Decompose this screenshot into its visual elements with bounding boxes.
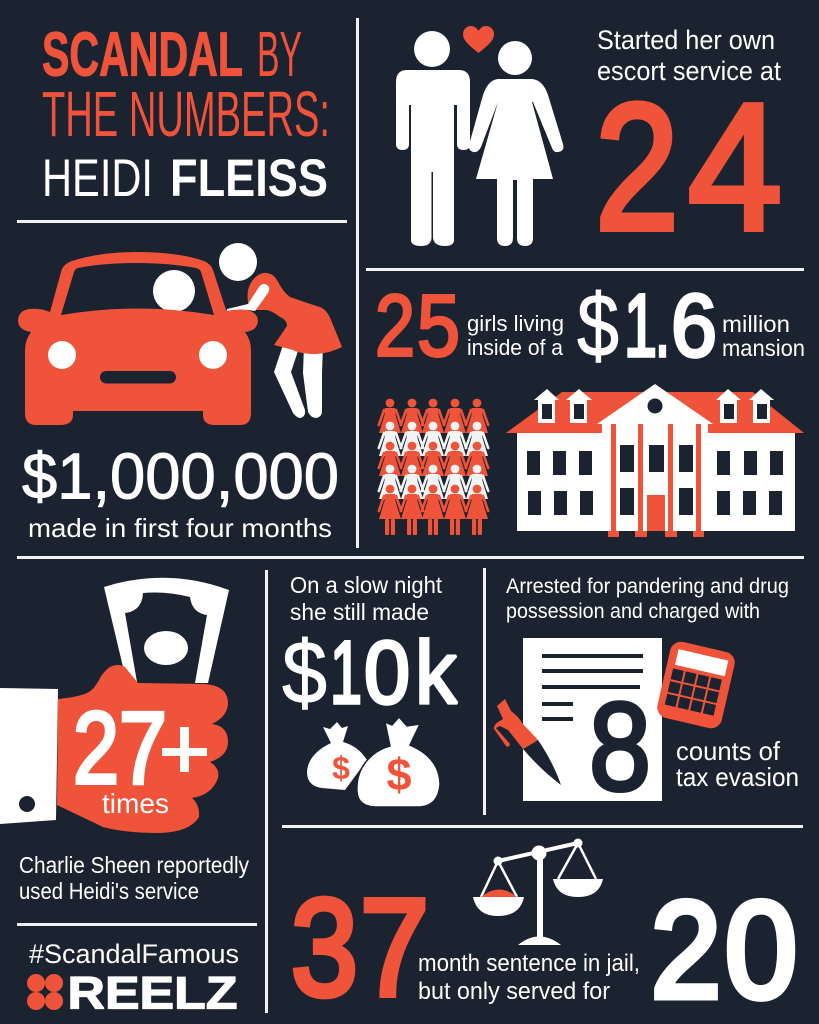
text: Charlie Sheen reportedly used Heidi's service: Charlie Sheen reportedly	[19, 852, 249, 878]
text: counts of tax evasion	[676, 736, 799, 792]
number: $10k: k	[415, 622, 457, 722]
title: HEIDI	[42, 149, 153, 208]
figure: $1,000,000 made in first four months: $1,000,000	[22, 440, 339, 512]
figure: 25 girls living inside of a: girls living	[467, 311, 564, 336]
icon: money bags: $	[332, 750, 350, 786]
icon: document with 8	[523, 638, 662, 817]
number: 37: 3	[291, 871, 358, 1024]
text: month sentence in jail: month sentence in jail,	[418, 950, 640, 977]
icon: mansion	[506, 384, 804, 537]
icon: hand in shirt cuff	[0, 665, 228, 833]
number: $10k: $	[282, 622, 327, 722]
icon: pen	[494, 699, 561, 785]
text: arrested for pandering: Arrested for pandering and drug	[506, 575, 789, 598]
figure: $1,000,000 made in first four months	[22, 440, 339, 543]
icon: money bags: $	[386, 749, 412, 800]
title: SCANDAL	[42, 20, 243, 90]
number: 20: 2	[651, 874, 721, 1024]
logo: REELZ: REELZ	[68, 968, 238, 1018]
icon: document with 8: 8	[589, 678, 651, 817]
icon: car with woman leaning in	[18, 243, 342, 425]
text: Charlie Sheen reportedly used Heidi's service: used Heidi's service	[19, 878, 199, 904]
figure: $1.6 million mansion: $	[577, 275, 619, 375]
text: started her own escort service: Started her own	[597, 25, 775, 55]
number: 20	[651, 874, 797, 1024]
figure: $1.6 million mansion	[577, 275, 805, 375]
title: THE NUMBERS:	[42, 78, 330, 150]
number: $10k: 0	[364, 622, 410, 722]
icon: money bags	[307, 717, 440, 807]
text: on a slow night she still made	[290, 572, 443, 625]
figure: 25 girls living inside of a	[375, 278, 564, 374]
figure: $1.6 million mansion: 1	[624, 275, 657, 375]
figure: 25 girls living inside of a: inside of a	[467, 335, 564, 360]
icon: scales of justice	[473, 838, 603, 945]
text: arrested for pandering: possession and charged with	[506, 600, 760, 623]
figure: 25 girls living inside of a: 5	[417, 278, 460, 374]
icon: calculator	[655, 640, 737, 730]
text: on a slow night she still made: she still made	[290, 599, 429, 625]
number: 37: 7	[360, 871, 429, 1024]
number: 24: 2	[595, 67, 679, 268]
text: month sentence in jail: but only served for	[418, 978, 610, 1005]
text: counts of tax evasion: tax evasion	[676, 762, 799, 792]
figure: $1.6 million mansion: mansion	[722, 335, 805, 361]
text: month sentence in jail	[418, 950, 640, 1005]
hashtag: #ScandalFamous	[29, 939, 239, 969]
number: 37	[291, 871, 429, 1024]
figure: $1.6 million mansion: 6	[671, 275, 717, 375]
number: $10k	[282, 622, 457, 722]
number: 20: 0	[725, 874, 797, 1024]
icon: money bill	[104, 578, 229, 683]
title: FLEISS	[170, 149, 328, 208]
figure: 27+ times	[73, 691, 207, 819]
title: BY	[257, 18, 302, 90]
text: started her own escort service	[597, 25, 781, 86]
text: started her own escort service: escort service at	[597, 56, 781, 86]
figure: $1.6 million mansion: .	[655, 275, 670, 375]
text: on a slow night she still made: On a slow night	[290, 572, 443, 598]
number: 24	[595, 67, 782, 268]
figure: $1.6 million mansion: million	[722, 311, 790, 337]
title	[42, 18, 330, 208]
figure: 27+ times: 2	[73, 691, 119, 805]
figure: 27+ times: 7	[119, 691, 167, 805]
text: arrested for pandering	[506, 575, 789, 623]
figure: 27+ times: times	[102, 788, 169, 819]
figure: 25 girls living inside of a: 2	[375, 278, 415, 374]
text: counts of tax evasion: counts of	[676, 736, 781, 766]
text: Charlie Sheen reportedly used Heidi's service	[19, 852, 249, 904]
icon: grid of 25 women	[379, 399, 488, 535]
number: $10k: 1	[330, 622, 362, 722]
icon: couple holding hands with heart	[396, 26, 563, 246]
number: 24: 4	[688, 67, 782, 268]
figure: $1,000,000 made in first four months: made in first four months	[28, 513, 332, 543]
